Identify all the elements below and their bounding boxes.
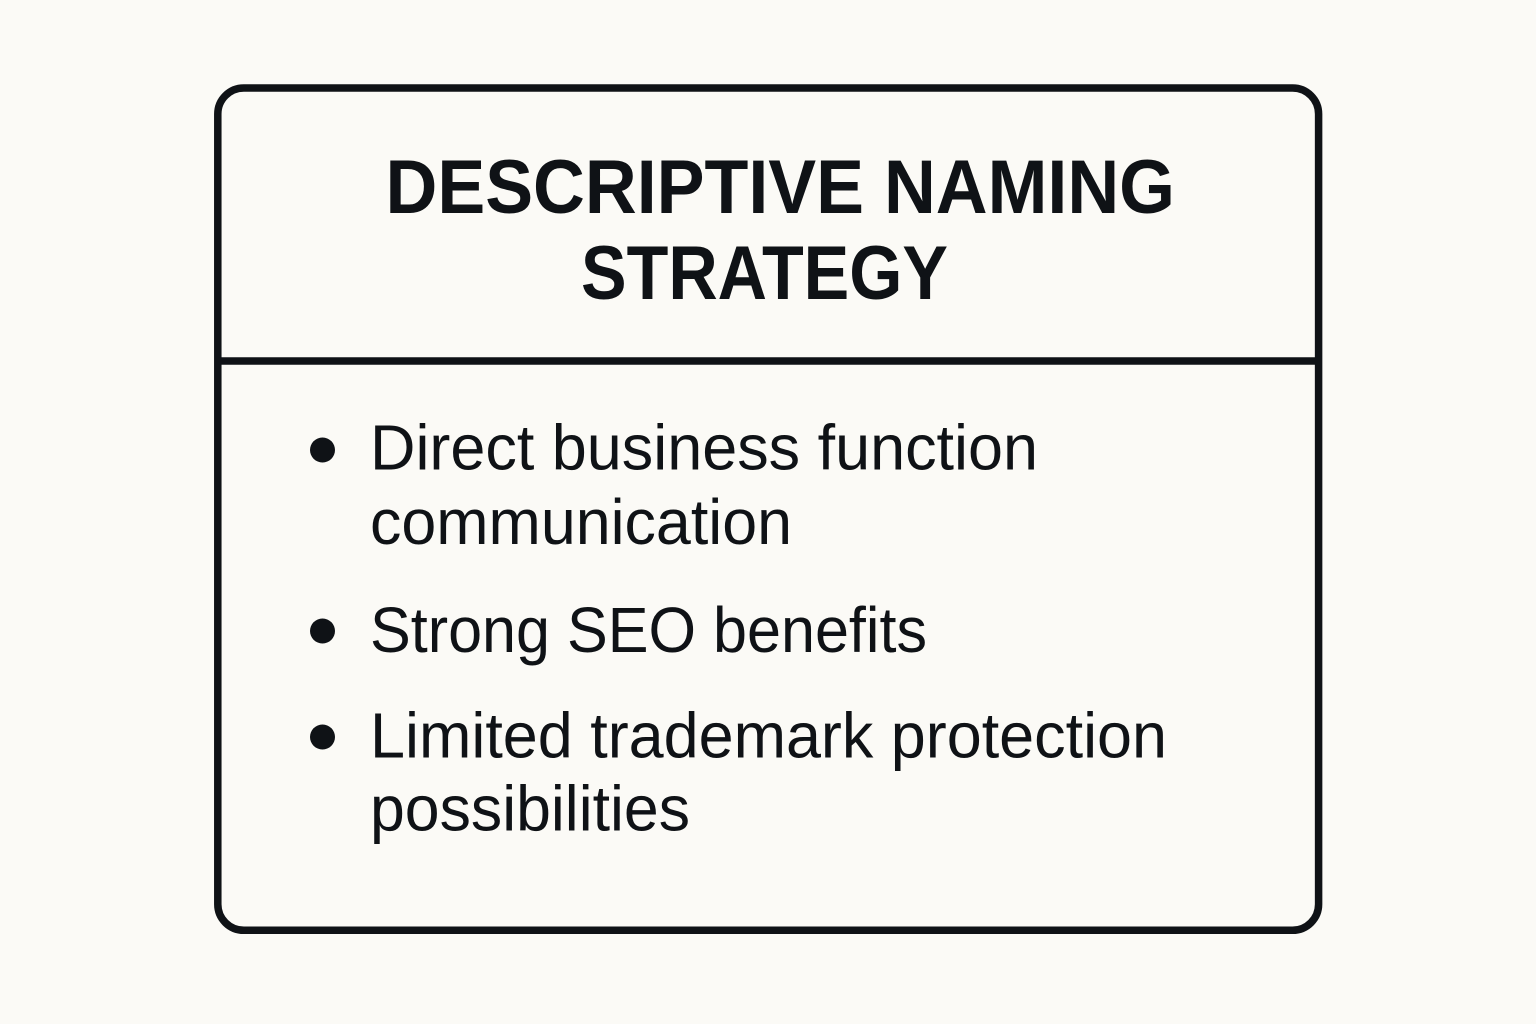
bullet item 3: possibilities [370, 772, 690, 844]
heading: DESCRIPTIVE NAMING [386, 145, 1175, 230]
bullet item 3: Limited trademark protection [370, 700, 1167, 772]
bullet item 2: Strong SEO benefits [370, 594, 927, 666]
bullet item 1 [310, 412, 1038, 558]
panel: card outline [218, 88, 1319, 930]
heading [386, 145, 1175, 316]
bullet item 3 [310, 700, 1167, 844]
bullet list [310, 412, 1167, 844]
heading: STRATEGY [581, 231, 948, 316]
bullet item 1: Direct business function [370, 412, 1038, 484]
bullet item 1: communication [370, 486, 792, 558]
